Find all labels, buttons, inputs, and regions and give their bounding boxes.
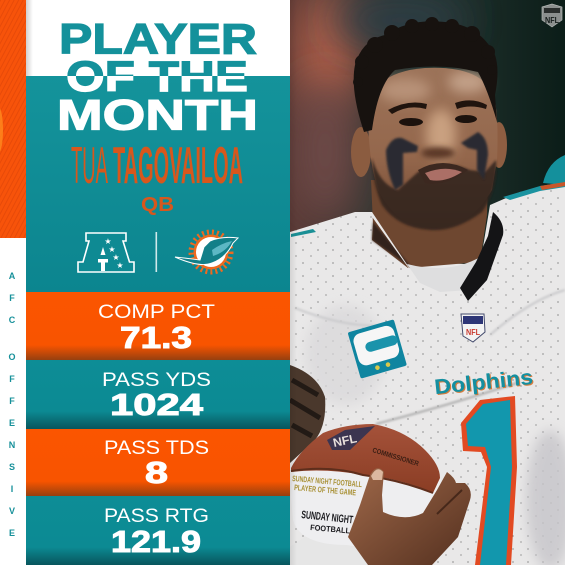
panel: pass yds bbox=[26, 360, 290, 429]
face bbox=[368, 68, 498, 196]
hand holding the ball bbox=[348, 468, 471, 565]
icon: Dolphins logo bbox=[175, 232, 238, 272]
player name: TUA bbox=[71, 137, 108, 195]
panel: pass rtg: PASS RTG bbox=[104, 506, 209, 527]
panel: pass tds bbox=[26, 429, 290, 496]
panel: pass rtg bbox=[26, 496, 290, 565]
ears bbox=[351, 127, 371, 177]
vertical label: AFC OFFENSIVE: E bbox=[9, 418, 15, 428]
title: Player of the Month bbox=[60, 23, 258, 131]
icon: AFC logo: ★ bbox=[104, 237, 112, 246]
football: COMMISSIONER bbox=[371, 447, 419, 468]
icon: AFC logo: ★ bbox=[116, 261, 124, 270]
vertical label: AFC OFFENSIVE: F bbox=[9, 374, 15, 384]
icon: AFC logo bbox=[78, 233, 134, 272]
vertical label: AFC OFFENSIVE: S bbox=[9, 462, 15, 472]
Dolphins jersey wordmark: Dolphins bbox=[433, 366, 534, 399]
panel: header bbox=[26, 0, 290, 292]
vertical label: AFC OFFENSIVE: I bbox=[11, 484, 13, 494]
jersey NFL shield bbox=[461, 314, 485, 342]
panel: pass rtg: 121.9 bbox=[111, 524, 201, 559]
panel: header: TAGOVAILOA bbox=[113, 137, 243, 195]
football: PLAYER OF THE GAME bbox=[294, 483, 357, 497]
vertical label: AFC OFFENSIVE: A bbox=[9, 271, 16, 281]
icon: AFC logo: ★ bbox=[108, 245, 116, 254]
number 1 bbox=[461, 396, 517, 565]
vertical label: AFC OFFENSIVE: C bbox=[9, 315, 16, 325]
vertical label: AFC OFFENSIVE: O bbox=[8, 352, 16, 362]
panel: pass tds: PASS TDS bbox=[104, 438, 209, 459]
title: Player of the Month: OF THE bbox=[66, 53, 248, 101]
eyes and brows bbox=[388, 102, 427, 114]
football: FOOTBALL bbox=[310, 523, 351, 535]
beard bbox=[372, 158, 496, 230]
hair bbox=[353, 17, 498, 132]
left strip: orange pattern bbox=[0, 0, 26, 238]
title: Player of the Month: PLAYER bbox=[59, 16, 257, 64]
player name bbox=[71, 137, 243, 195]
vertical label: AFC OFFENSIVE: E bbox=[9, 528, 15, 538]
football: NFL bbox=[332, 431, 358, 450]
Dolphins jersey wordmark: Dolphins bbox=[434, 367, 535, 400]
title: Player of the Month: OF THE bbox=[66, 53, 248, 101]
NFL shield logo: NFL bbox=[545, 16, 559, 25]
panel: comp pct: COMP PCT bbox=[98, 302, 215, 323]
icon: AFC logo: ★ bbox=[112, 253, 120, 262]
football: SUNDAY NIGHT FOOTBALL bbox=[292, 474, 362, 489]
vertical label: AFC OFFENSIVE: V bbox=[9, 506, 15, 516]
panel: pass yds: 1024 bbox=[110, 387, 204, 422]
jersey NFL shield: NFL bbox=[466, 328, 480, 337]
NFL shield logo bbox=[542, 4, 562, 27]
Dolphins jersey wordmark bbox=[435, 372, 534, 396]
panel: pass tds: 8 bbox=[145, 455, 168, 490]
football: SUNDAY NIGHT bbox=[301, 509, 354, 526]
position: QB bbox=[141, 194, 174, 216]
title: Player of the Month: MONTH bbox=[57, 92, 258, 140]
vertical label: AFC OFFENSIVE: F bbox=[9, 293, 15, 303]
neck bbox=[371, 180, 488, 268]
black strap bbox=[460, 212, 503, 301]
eye black bbox=[386, 138, 418, 190]
forearm with tattoos bbox=[290, 365, 325, 463]
panel: pass yds: PASS YDS bbox=[102, 370, 211, 391]
panel: comp pct bbox=[26, 292, 290, 360]
photo: Tua Tagovailoa in Dolphins jersey bbox=[290, 0, 565, 565]
vertical label: AFC OFFENSIVE: F bbox=[9, 396, 15, 406]
sleeve below ball bbox=[296, 541, 364, 563]
vertical label: AFC OFFENSIVE bbox=[8, 271, 16, 538]
captain patch bbox=[348, 319, 407, 379]
jersey bbox=[290, 183, 565, 565]
vertical label: AFC OFFENSIVE: N bbox=[9, 440, 15, 450]
football bbox=[290, 424, 440, 546]
undershirt bbox=[407, 258, 478, 292]
panel: comp pct: 71.3 bbox=[120, 320, 192, 355]
